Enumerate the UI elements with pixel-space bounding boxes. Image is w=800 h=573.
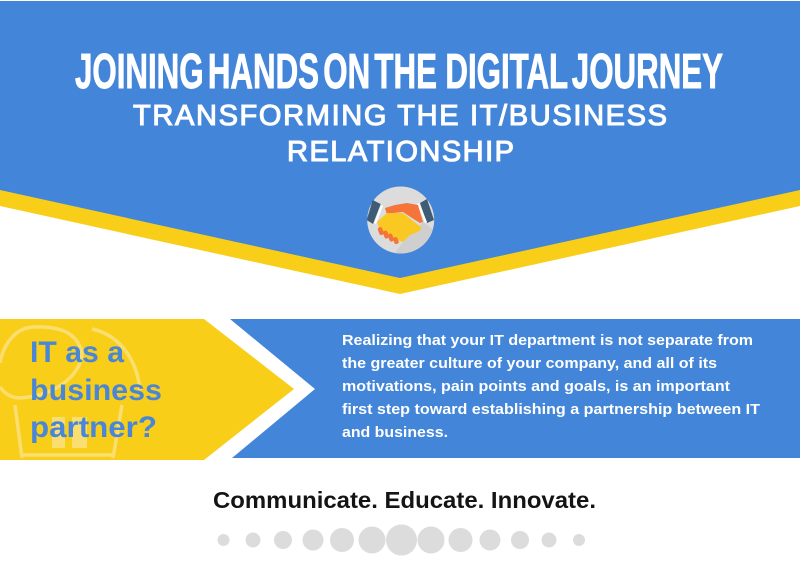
subtitle: TRANSFORMING THE IT/BUSINESS xyxy=(133,100,667,132)
arrow heading: partner? xyxy=(30,411,157,444)
panel: yellow arrow xyxy=(0,319,294,460)
panel: blue text box xyxy=(230,319,800,458)
subtitle: RELATIONSHIP xyxy=(287,136,514,168)
body text: motivations, pain points and goals, is an important xyxy=(342,378,730,395)
arrow heading xyxy=(30,336,162,444)
dotted divider xyxy=(218,524,585,556)
icon: faint lightbulb watermark xyxy=(0,327,140,458)
tagline: Communicate. Educate. Innovate. xyxy=(213,487,596,513)
arrow heading: business xyxy=(30,374,162,407)
subtitle xyxy=(133,100,667,168)
body text: and business. xyxy=(342,424,448,441)
body text: first step toward establishing a partnership between IT xyxy=(342,401,760,418)
icon: handshake xyxy=(366,186,434,254)
banner: header chevron xyxy=(0,1,800,294)
body text xyxy=(342,332,760,441)
body text: Realizing that your IT department is not separate from xyxy=(342,332,753,349)
body text: the greater culture of your company, and all of its xyxy=(342,355,717,372)
arrow heading: IT as a xyxy=(30,336,124,369)
